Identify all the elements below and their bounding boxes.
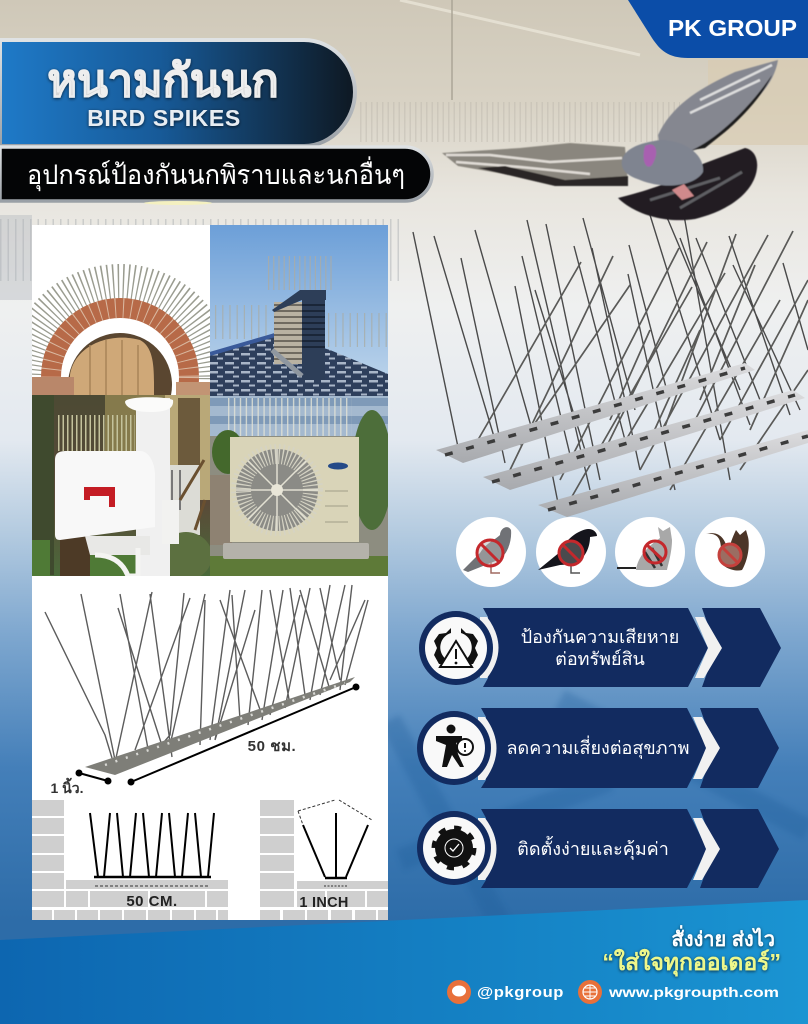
pigeon — [442, 60, 778, 220]
icon: cat — [615, 517, 685, 587]
icon: gear warning — [419, 611, 493, 685]
diagram: spike strip with dimensions: 1 นิ้ว. — [50, 777, 84, 796]
icon: gear check — [417, 811, 491, 885]
benefit 1: ป้องกันความเสียหาย — [521, 627, 679, 647]
subtitle bar — [0, 147, 432, 205]
brand tab: PK GROUP: PK GROUP — [668, 15, 797, 41]
chevron — [693, 818, 720, 880]
product photo: three spike strips — [413, 215, 808, 517]
icon: crow — [536, 517, 606, 587]
benefit 1 — [419, 608, 781, 687]
title panel — [0, 40, 355, 146]
diagram: front view on brick wall — [260, 800, 388, 920]
dimension: length — [131, 687, 356, 782]
photo: roof and chimney with spikes — [210, 225, 388, 396]
left wing — [442, 143, 628, 186]
subtitle bar: อุปกรณ์ป้องกันนกพิราบและนกอื่นๆ — [27, 156, 405, 192]
contact: LINE: @pkgroup — [477, 985, 564, 1001]
slogan: สั่งง่าย ส่งไว — [671, 924, 775, 951]
icon: person with warning — [417, 711, 491, 785]
contact: LINE — [447, 980, 564, 1004]
diagram: front view on brick wall: 1 INCH — [299, 895, 349, 911]
body — [622, 140, 703, 186]
strip 2 — [483, 390, 805, 490]
spike base strip — [85, 677, 355, 775]
photo: brick arch with spikes — [32, 264, 210, 395]
icon: squirrel — [695, 517, 765, 587]
dimension: width — [79, 773, 108, 781]
benefit 2 — [417, 708, 779, 788]
footer band: “ใส่ใจทุกออเดอร์” — [602, 948, 781, 977]
benefit 1: ต่อทรัพย์สิน — [555, 649, 645, 669]
right wing — [658, 60, 778, 152]
icons: animals deterred — [456, 517, 765, 587]
chevron — [695, 617, 722, 678]
benefit 3 — [417, 809, 779, 888]
benefit 2: ลดความเสี่ยงต่อสุขภาพ — [507, 735, 689, 759]
panel: usage photos and size diagrams — [24, 225, 392, 920]
diagram: spike strip with dimensions: 50 ชม. — [248, 738, 296, 755]
contact: website: www.pkgroupth.com — [608, 984, 779, 1000]
heading: English subtitle: BIRD SPIKES — [87, 105, 241, 131]
photo: air conditioner with spikes — [210, 396, 392, 576]
benefit 3: ติดตั้งง่ายและคุ้มค่า — [517, 836, 669, 860]
diagram: side view on brick wall — [32, 800, 228, 920]
chevron — [693, 717, 720, 779]
brand tab: PK GROUP — [628, 0, 808, 58]
diagram: side view on brick wall: 50 CM. — [126, 893, 178, 910]
tail — [618, 148, 757, 220]
contact: website — [578, 980, 779, 1004]
strip 3 — [538, 430, 808, 517]
photo: mailbox with spikes — [32, 395, 212, 580]
footer band — [0, 900, 808, 1024]
heading: Thai title: หนามกันนก — [47, 55, 279, 106]
diagram: spike strip with dimensions — [45, 585, 368, 796]
icon: pigeon — [456, 517, 526, 587]
strip 1 — [436, 363, 755, 463]
